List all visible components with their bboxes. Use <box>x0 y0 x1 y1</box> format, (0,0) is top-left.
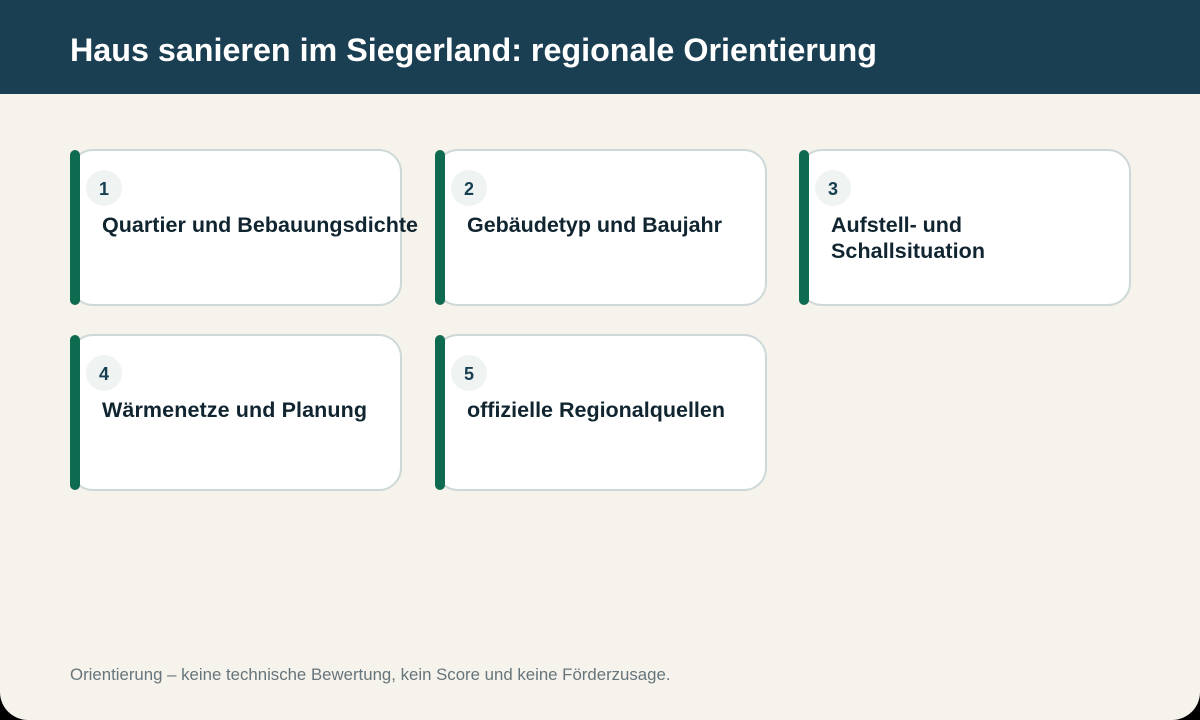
footer note: Orientierung – keine technische Bewertung, kein Score und keine Förderzusage. <box>70 665 670 684</box>
title: Haus sanieren im Siegerland: regionale Orientierung <box>70 32 877 68</box>
header band <box>0 0 1200 94</box>
panel: card 3: Aufstell- und <box>831 213 962 237</box>
panel: card 1: Quartier und Bebauungsdichte <box>102 213 418 237</box>
panel: card 2: Gebäudetyp und Baujahr <box>467 213 723 237</box>
panel: card 3 <box>799 150 1130 305</box>
panel: card 4: Wärmenetze und Planung <box>102 398 367 422</box>
panel: card 1 <box>70 150 418 305</box>
panel: card 3: 3 <box>828 179 838 199</box>
panel: card 2: 2 <box>464 179 474 199</box>
panel: card 2 <box>435 150 766 305</box>
panel: card 5 <box>435 335 766 490</box>
panel: card 5: offizielle Regionalquellen <box>467 398 725 422</box>
panel: card 4: 4 <box>99 364 109 384</box>
panel: card 1: 1 <box>99 179 109 199</box>
panel: card 4 <box>70 335 401 490</box>
panel: card 5: 5 <box>464 364 474 384</box>
panel: card 3: Schallsituation <box>831 239 985 263</box>
